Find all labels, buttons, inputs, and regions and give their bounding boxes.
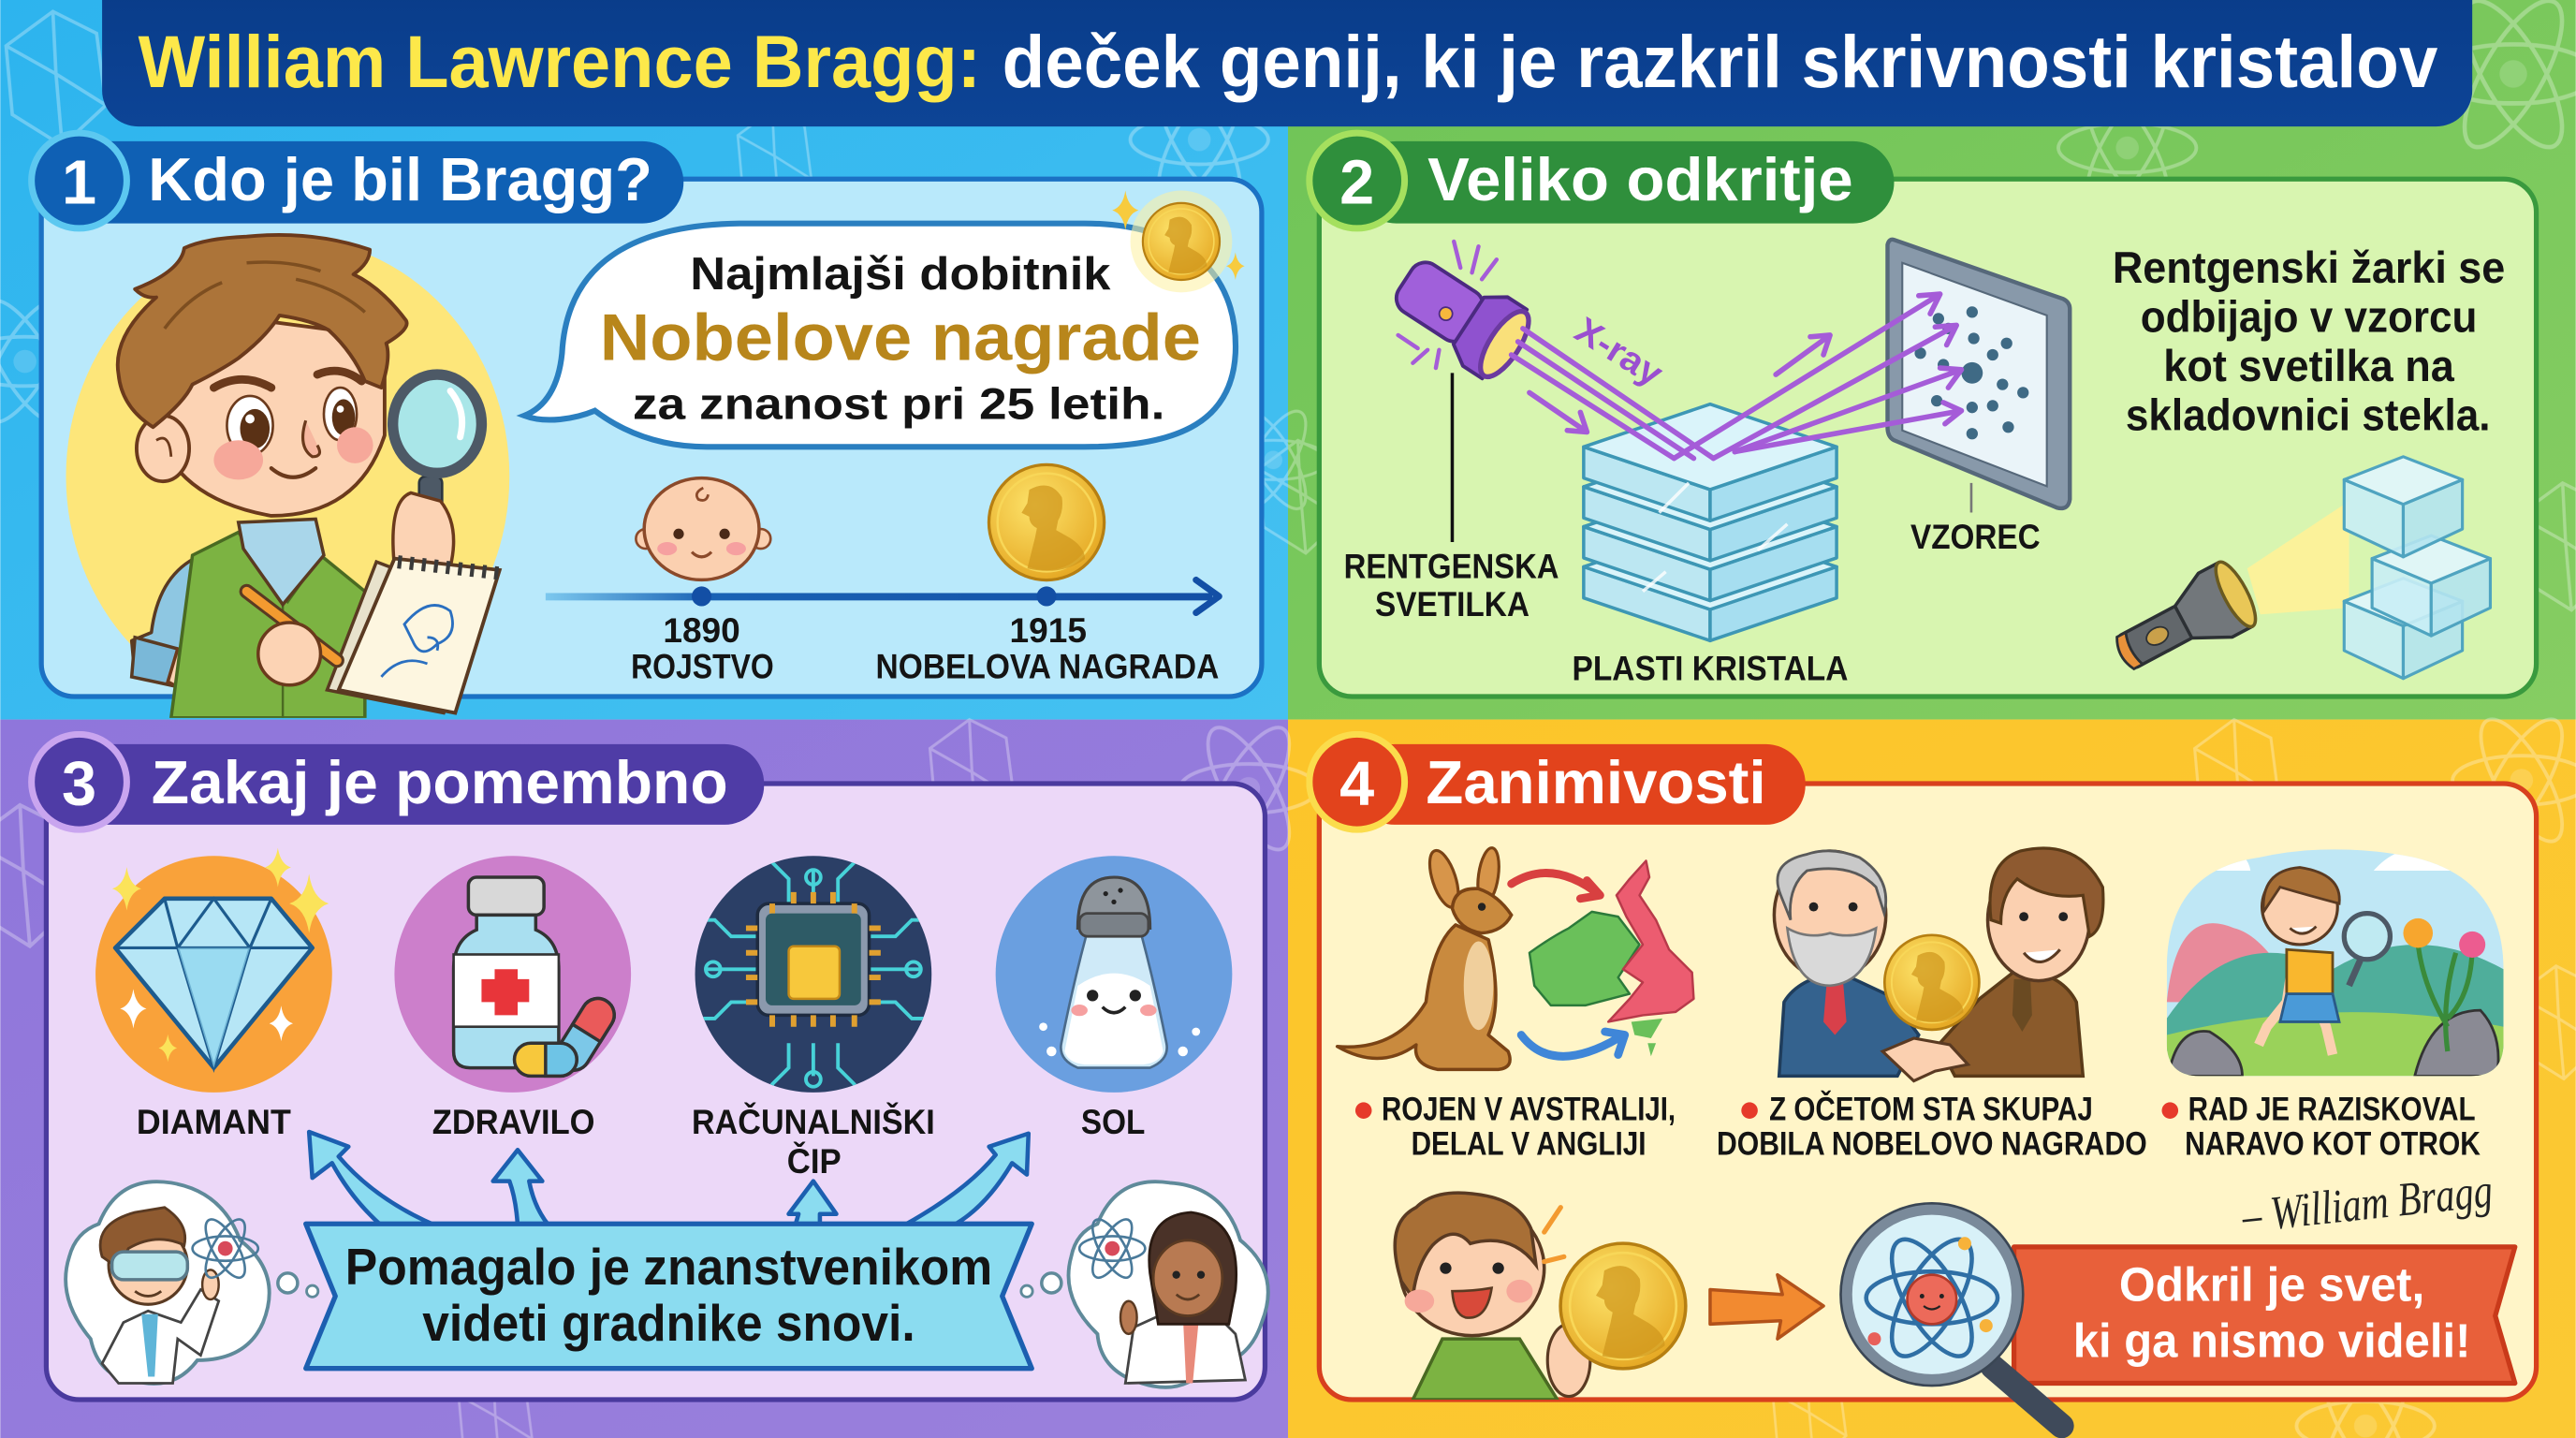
icon: salt shaker [996, 856, 1232, 1093]
explanation text: skladovnici stekla. [2126, 391, 2490, 441]
ribbon [2014, 1247, 2515, 1383]
bubble text: Najmlajši dobitnik [690, 249, 1111, 300]
explanation text [2113, 243, 2505, 441]
panel 3: Zakaj je pomembno [32, 734, 1268, 1400]
leader line and label: x-ray lamp: RENTGENSKA [1344, 548, 1559, 586]
label: computer chip [692, 1102, 935, 1181]
arrows from banner to icons [309, 1132, 1029, 1225]
timeline labels [631, 611, 1219, 686]
heading 1: 1 [62, 149, 96, 218]
background: green quadrant [1288, 0, 2576, 720]
ribbon: ki ga nismo videli! [2073, 1313, 2470, 1367]
label: crystal layers: PLASTI KRISTALA [1573, 649, 1848, 687]
title: subtitle: deček genij, ki je razkril skrivnosti kristalov [1003, 21, 2437, 103]
timeline labels: NOBELOVA NAGRADA [876, 648, 1219, 686]
arrow [1710, 1275, 1823, 1339]
heading 3: 3 [62, 750, 96, 819]
illustration: boy with magnifier and notepad [66, 235, 509, 718]
heading 2: Veliko odkritje [1427, 145, 1853, 213]
x-ray beams [1512, 294, 1961, 459]
icon: small medal [1112, 191, 1245, 292]
detector screen [1887, 240, 2070, 512]
signature: – William Bragg [2239, 1165, 2496, 1243]
caption: playful research [2162, 1092, 2481, 1163]
caption: born in Australia: ROJEN V AVSTRALIJI, [1382, 1092, 1676, 1128]
leader line and label: x-ray lamp [1344, 373, 1559, 624]
heading 4: 4 [1339, 750, 1374, 819]
magnifier with atom [1840, 1203, 2061, 1426]
explanation text: Rentgenski žarki se [2113, 243, 2505, 293]
timeline [546, 580, 1219, 686]
background: yellow quadrant [1288, 720, 2576, 1438]
heading 4: Zanimivosti [1426, 748, 1766, 816]
ribbon: Odkril je svet, [2119, 1258, 2424, 1312]
background: blue quadrant [0, 0, 1288, 720]
banner: main message: videti gradnike snovi. [422, 1295, 915, 1352]
heading 2: 2 [1339, 149, 1374, 218]
illustration: kangaroo and map [1338, 846, 1693, 1069]
heading 4 [1310, 734, 1806, 829]
label: diamond: DIAMANT [137, 1103, 291, 1141]
crystal layers [1584, 404, 1837, 640]
leader line and label: x-ray lamp: SVETILKA [1375, 585, 1530, 624]
timeline labels: ROJSTVO [631, 648, 774, 686]
illustration: flashlight on glass cubes [2104, 457, 2490, 687]
banner: main message [306, 1224, 1032, 1369]
caption: with father: Z OČETOM STA SKUPAJ [1769, 1091, 2093, 1128]
illustration: boy exploring nature [2167, 841, 2503, 1079]
icon: x-ray flashlight [1383, 242, 1539, 387]
timeline labels: 1915 [1010, 611, 1087, 650]
label: computer chip: RAČUNALNIŠKI [692, 1102, 935, 1141]
panel 4: Zanimivosti [1310, 734, 2537, 1426]
heading 1: Kdo je bil Bragg? [148, 145, 652, 213]
speech bubble [524, 224, 1236, 447]
heading 3 [32, 734, 764, 829]
title: name: William Lawrence Bragg: [139, 21, 981, 103]
caption: with father [1717, 1091, 2147, 1163]
bubble text: Nobelove nagrade [600, 300, 1201, 374]
bubble text [600, 249, 1201, 429]
heading 3: Zakaj je pomembno [152, 748, 728, 816]
thought bubble: scientist with dark hair [1021, 1181, 1268, 1387]
explanation text: odbijajo v vzorcu [2141, 292, 2477, 342]
caption: with father: DOBILA NOBELOVO NAGRADO [1717, 1126, 2147, 1163]
panel 1: Kdo je bil Bragg [32, 133, 1262, 718]
label: salt: SOL [1081, 1103, 1145, 1141]
title banner [102, 0, 2472, 126]
background: purple quadrant [0, 720, 1288, 1438]
icon: baby [636, 478, 770, 580]
icon: Nobel medal [988, 464, 1105, 580]
caption: born in Australia: DELAL V ANGLIJI [1412, 1126, 1647, 1163]
heading 1 [32, 133, 683, 228]
label: computer chip: ČIP [787, 1141, 842, 1181]
explanation text: kot svetilka na [2163, 342, 2454, 391]
icon: computer chip [695, 846, 931, 1101]
bubble text: za znanost pri 25 letih. [633, 379, 1164, 429]
label: x-ray: X-ray [1568, 310, 1670, 395]
illustration: boy with medal [1395, 1193, 1686, 1400]
caption: playful research: NARAVO KOT OTROK [2185, 1126, 2481, 1163]
illustration: father and son with medal [1774, 848, 2103, 1081]
label: medicine: ZDRAVILO [432, 1103, 595, 1141]
caption: born in Australia [1355, 1092, 1676, 1163]
panel 2: Veliko odkritje [1310, 133, 2537, 697]
timeline labels: 1890 [663, 611, 740, 650]
caption: playful research: RAD JE RAZISKOVAL [2188, 1092, 2476, 1128]
heading 2 [1310, 133, 1894, 228]
label: sample: VZOREC [1910, 518, 2041, 556]
icon: diamond [95, 847, 332, 1093]
thought bubble: scientist with goggles [66, 1181, 318, 1384]
banner: main message: Pomagalo je znanstvenikom [345, 1239, 992, 1296]
icon: medicine [394, 856, 631, 1093]
